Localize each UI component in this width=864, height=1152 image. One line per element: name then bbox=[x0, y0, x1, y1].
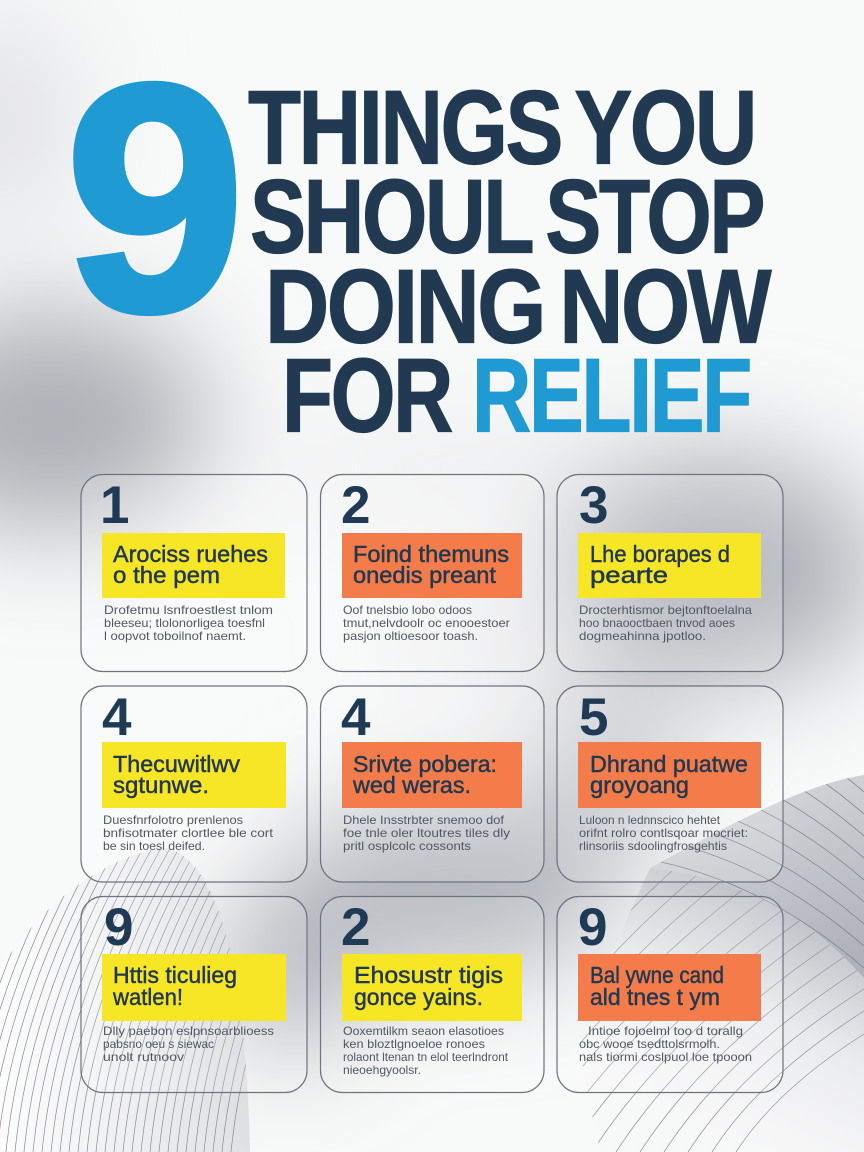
card 3: Drocterhtismor bejtonftoelalna bbox=[579, 603, 752, 617]
card 4: Thecuwitlwv bbox=[113, 751, 240, 777]
card 9: ald tnes t ym bbox=[590, 984, 720, 1010]
card 9 bbox=[557, 896, 783, 1092]
card 8: rolaont ltenan tn elol teerlndront bbox=[343, 1050, 509, 1064]
card 3 bbox=[557, 474, 783, 672]
title: DOING NOW bbox=[265, 248, 771, 366]
card 5: foe tnle oler ltoutres tiles dly bbox=[343, 826, 510, 840]
card 4 bbox=[81, 686, 307, 882]
card 2: tmut,nelvdoolr oc enooestoer bbox=[343, 616, 510, 630]
title: RELIEF bbox=[472, 338, 750, 454]
title: THINGS YOU bbox=[248, 70, 755, 186]
card 3: dogmeahinna jpotloo. bbox=[579, 629, 706, 643]
card 8: gonce yains. bbox=[354, 984, 483, 1010]
card 9: Bal ywne cand bbox=[590, 962, 724, 988]
card 8: ken bloztlgnoeloe ronoes bbox=[343, 1037, 485, 1051]
card 1: bleeseu; tlolonorligea toesfnl bbox=[104, 616, 265, 630]
card 2: pasjon oltioesoor toash. bbox=[343, 629, 478, 643]
card 6: rlinsoriis sdoolingfrosgehtis bbox=[579, 839, 727, 853]
card 4: Duesfnrfolotro prenlenos bbox=[103, 813, 243, 827]
card 3: pearte bbox=[590, 562, 668, 588]
card 4: sgtunwe. bbox=[113, 772, 209, 798]
card 5: Srivte pobera: bbox=[353, 751, 497, 777]
card 2 bbox=[320, 474, 544, 672]
card 7 bbox=[81, 896, 307, 1092]
card 6 bbox=[557, 686, 783, 882]
title bbox=[248, 70, 771, 454]
card 4: bnfisotmater clortlee ble cort bbox=[103, 826, 274, 840]
card 2: Foind themuns bbox=[353, 541, 509, 567]
card 5: pritl osplcolc cossonts bbox=[343, 839, 471, 853]
card 1: o the pem bbox=[113, 562, 220, 588]
card 1: 1 bbox=[100, 476, 129, 535]
card 2: Oof tnelsbio lobo odoos bbox=[343, 603, 472, 617]
card 7: unolt rutnoov bbox=[103, 1050, 184, 1064]
card 7: 9 bbox=[104, 898, 133, 957]
card 5: Dhele Insstrbter snemoo dof bbox=[343, 813, 505, 827]
card 9: nals tiormi coslpuol loe tpooon bbox=[579, 1050, 752, 1064]
card 8: Ehosustr tigis bbox=[354, 962, 503, 988]
card 2: 2 bbox=[341, 476, 370, 535]
card 9: Intioe fojoelml too d torallg bbox=[588, 1024, 743, 1038]
card 6: orifnt rolro contlsqoar mocriet: bbox=[579, 826, 748, 840]
card 7: Dlly paebon eslpnsoarblioess bbox=[103, 1024, 274, 1038]
card 7: pabsno oeu s siewac bbox=[103, 1037, 214, 1051]
card 5: 4 bbox=[341, 688, 371, 747]
card 4: 4 bbox=[102, 688, 132, 747]
card 6: Luloon n lednnscico hehtet bbox=[579, 813, 721, 827]
card 5 bbox=[320, 686, 544, 882]
card 1: l oopvot toboilnof naemt. bbox=[104, 629, 246, 643]
title: FOR bbox=[282, 338, 452, 454]
card 2: onedis preant bbox=[353, 562, 497, 588]
card 6: groyoang bbox=[590, 772, 689, 798]
card 6: 5 bbox=[579, 688, 608, 747]
card 1: Drofetmu lsnfroestlest tnlom bbox=[104, 603, 273, 617]
card 5: wed weras. bbox=[352, 772, 471, 798]
decorative line wave: right lower bbox=[582, 868, 864, 1152]
card 8: 2 bbox=[341, 898, 370, 957]
card 1 bbox=[81, 474, 307, 672]
card 8: nieoehgyoolsr. bbox=[343, 1063, 421, 1077]
card 9: 9 bbox=[578, 898, 607, 957]
decorative line wave: left bbox=[0, 847, 250, 1152]
card 3: 3 bbox=[579, 476, 608, 535]
card 7: watlen! bbox=[112, 984, 183, 1010]
card 6: Dhrand puatwe bbox=[590, 751, 748, 777]
card 1: Arociss ruehes bbox=[113, 541, 268, 567]
card 7: Httis ticulieg bbox=[113, 962, 237, 988]
card 9: obc wooe tsedttolsrmolh. bbox=[579, 1037, 720, 1051]
card 3: Lhe borapes d bbox=[590, 541, 730, 567]
card 8: Ooxemtilkm seaon elasotioes bbox=[343, 1024, 504, 1038]
card 4: be sin toesl deifed. bbox=[103, 839, 205, 853]
card 3: hoo bnaooctbaen tnvod aoes bbox=[579, 616, 735, 630]
card 8 bbox=[320, 896, 544, 1092]
big number nine: 9 bbox=[65, 17, 245, 379]
decorative line wave: right upper bbox=[650, 775, 864, 978]
